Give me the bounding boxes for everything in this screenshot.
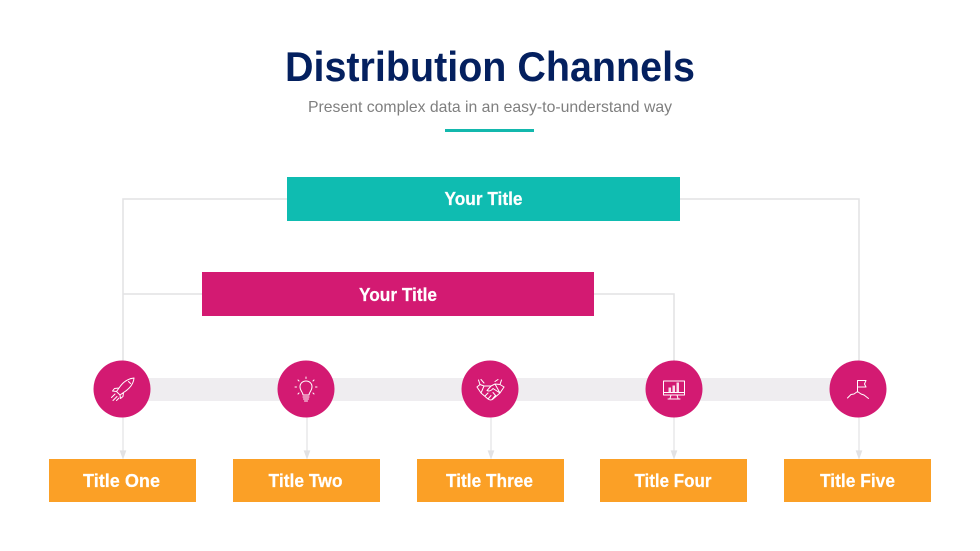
- box: Title Three: [417, 459, 564, 502]
- icon: handshake: [462, 360, 518, 418]
- top title bar: [287, 177, 680, 221]
- box: Title One: [49, 459, 196, 502]
- accent underline: [445, 129, 534, 132]
- arrow: channel four down: [672, 417, 676, 458]
- icon: monitor with chart: [646, 360, 702, 418]
- connector: top title to outer channels: [123, 199, 859, 361]
- box: Title Five: [784, 459, 931, 502]
- icon: rocket: [94, 360, 150, 418]
- box: Title Two: [233, 459, 380, 502]
- timeline band: [122, 378, 858, 401]
- arrow: channel three down: [488, 417, 494, 458]
- subtitle: Present complex data in an easy-to-understand way: [308, 99, 672, 116]
- box: Title Four: Title Four: [634, 471, 712, 491]
- icon: flag on mountain: [830, 360, 886, 418]
- box: Title Two: Title Two: [268, 471, 342, 491]
- box: Title Five: Title Five: [820, 471, 895, 491]
- arrow: channel five down: [856, 417, 862, 458]
- title: Distribution Channels: [285, 43, 695, 90]
- arrow: channel one down: [120, 417, 126, 458]
- connector: second title to channels: [123, 294, 674, 361]
- box: Title One: Title One: [83, 471, 160, 491]
- box: Title Three: Title Three: [446, 471, 533, 491]
- second title bar: Your Title: [359, 285, 437, 305]
- box: Title Four: [600, 459, 747, 502]
- arrow: channel two down: [304, 417, 310, 458]
- second title bar: [202, 272, 594, 316]
- top title bar: Your Title: [444, 189, 522, 209]
- icon: light bulb: [278, 360, 334, 418]
